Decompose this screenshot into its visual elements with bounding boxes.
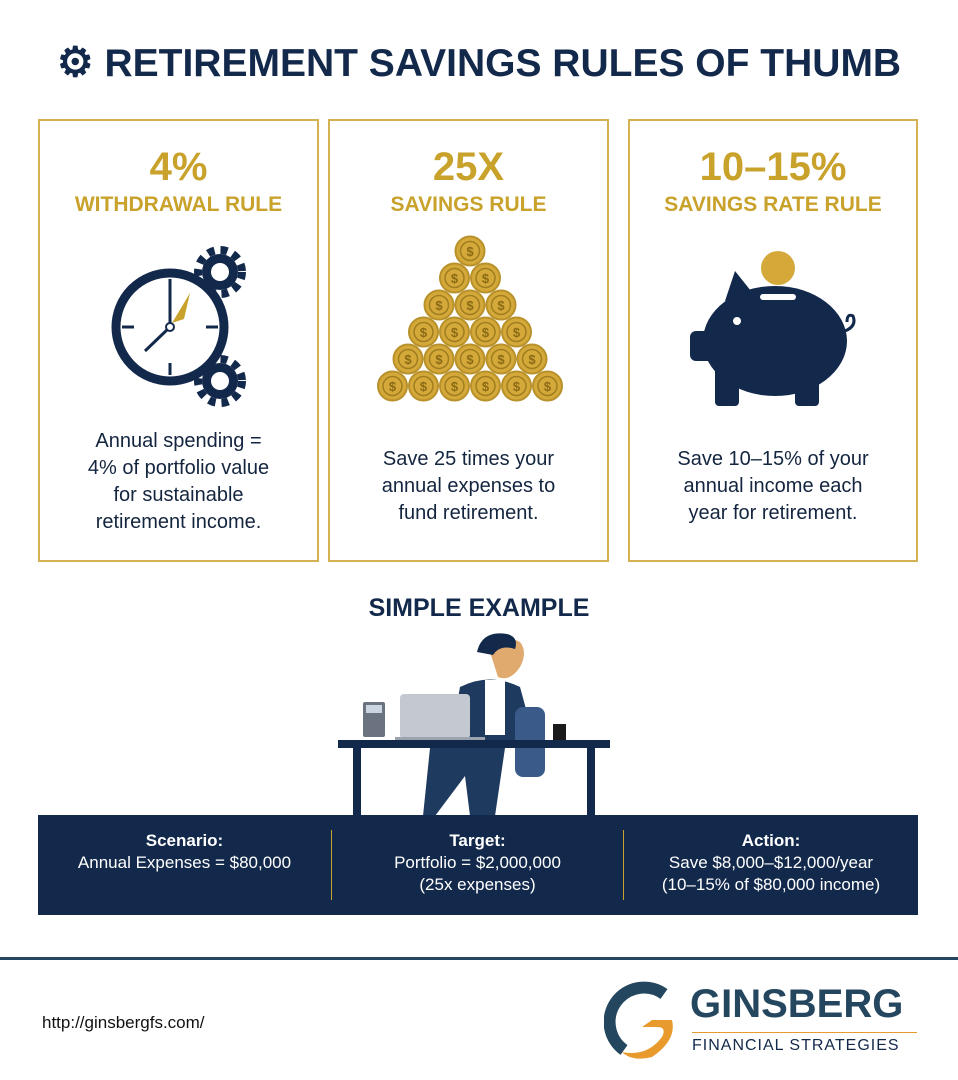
panel: 10-15% savings rate rule: annual income each <box>683 475 862 497</box>
icon: G logo <box>604 982 673 1059</box>
panel: 4% withdrawal rule: retirement income. <box>96 511 261 533</box>
logo: FINANCIAL STRATEGIES <box>692 1037 900 1054</box>
panel: 25x savings rule: SAVINGS RULE <box>391 193 546 216</box>
column: scenario <box>78 831 291 872</box>
panel: 10-15% savings rate rule: year for retirement. <box>689 502 857 524</box>
column: action: (10–15% of $80,000 income) <box>662 875 880 894</box>
heading: simple example: SIMPLE EXAMPLE <box>369 594 589 622</box>
panel: 4% withdrawal rule <box>38 119 319 562</box>
panel: 4% withdrawal rule: Annual spending = <box>95 430 262 452</box>
column: target: (25x expenses) <box>419 875 536 894</box>
panel: 10-15% savings rate rule: 10–15% <box>700 145 846 189</box>
panel: 25x savings rule <box>328 119 609 562</box>
column: target: Portfolio = $2,000,000 <box>394 853 561 872</box>
column: target: Target: <box>449 831 506 850</box>
logo <box>604 982 917 1059</box>
column: action: Save $8,000–$12,000/year <box>669 853 873 872</box>
panel: 25x savings rule: Save 25 times your <box>383 448 554 470</box>
panel: 25x savings rule: 25X <box>433 145 504 189</box>
panel: 4% withdrawal rule: 4% of portfolio value <box>88 457 269 479</box>
column: action <box>662 831 880 894</box>
column: target <box>331 830 624 900</box>
panel: 10-15% savings rate rule <box>628 119 918 562</box>
column: action: Action: <box>742 831 800 850</box>
url: http://ginsbergfs.com/ <box>42 1013 205 1032</box>
illustration: person at desk <box>338 633 610 815</box>
icon: coin pyramid <box>377 236 563 402</box>
panel: 25x savings rule: annual expenses to <box>382 475 555 497</box>
panel: 4% withdrawal rule: for sustainable <box>113 484 244 506</box>
column: scenario: Annual Expenses = $80,000 <box>78 853 291 872</box>
icon: clock with gears <box>112 246 246 407</box>
example bar <box>38 815 918 915</box>
icon: piggy bank <box>690 251 856 406</box>
column: scenario: Scenario: <box>146 831 223 850</box>
panel: 10-15% savings rate rule: SAVINGS RATE RULE <box>664 193 882 216</box>
title: ⚙ RETIREMENT SAVINGS RULES OF THUMB <box>57 39 901 85</box>
panel: 4% withdrawal rule: WITHDRAWAL RULE <box>75 193 282 216</box>
panel: 10-15% savings rate rule: Save 10–15% of your <box>677 448 869 470</box>
panel: 4% withdrawal rule: 4% <box>150 145 207 189</box>
panel: 25x savings rule: fund retirement. <box>398 502 539 524</box>
logo: GINSBERG <box>690 982 903 1026</box>
